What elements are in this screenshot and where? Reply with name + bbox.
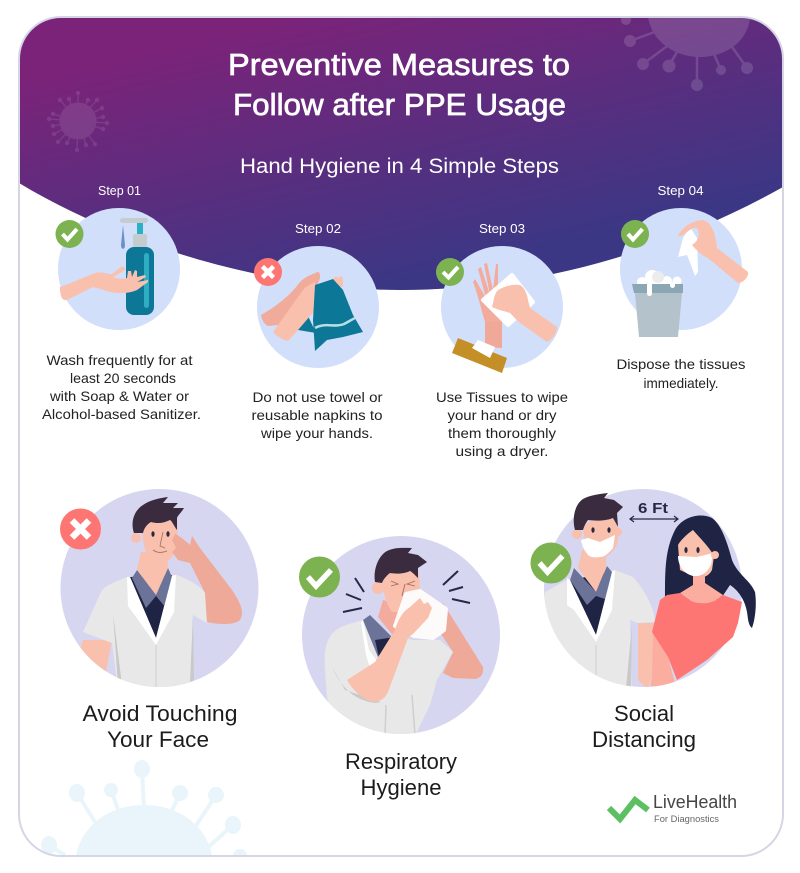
subtitle: Hand Hygiene in 4 Simple Steps xyxy=(240,155,559,178)
step text xyxy=(252,389,383,441)
illustration: man touching face xyxy=(78,497,242,690)
step text: with Soap & Water or xyxy=(49,388,189,404)
6 ft distance marker xyxy=(630,500,678,522)
check badge xyxy=(436,258,464,286)
label: Social xyxy=(614,701,674,726)
6 ft distance marker: 6 Ft xyxy=(638,500,668,517)
step text xyxy=(436,389,568,459)
step text: reusable napkins to xyxy=(252,407,383,423)
label xyxy=(592,701,696,752)
step 01 xyxy=(42,183,201,422)
icon: hand wiped xyxy=(473,263,505,348)
woman xyxy=(665,515,756,628)
icon: soap dispenser xyxy=(120,218,154,315)
logo: LiveHealth: For Diagnostics xyxy=(654,814,720,824)
step text: least 20 seconds xyxy=(70,370,176,386)
step text: wipe your hands. xyxy=(260,425,373,441)
title: Preventive Measures to xyxy=(228,47,570,82)
step text: using a dryer. xyxy=(456,443,548,459)
icon: tissue box xyxy=(452,338,507,373)
step text: them thoroughly xyxy=(448,425,556,441)
step text: Use Tissues to wipe xyxy=(436,389,568,405)
label: Your Face xyxy=(107,727,209,752)
step text xyxy=(42,352,201,422)
cross badge xyxy=(60,508,101,550)
label: Avoid Touching xyxy=(82,701,238,726)
header wave panel xyxy=(19,17,783,290)
illustration: man sneezing into tissue xyxy=(325,548,483,740)
panel: respiratory hygiene xyxy=(299,536,500,800)
step 01: Step 01 xyxy=(98,183,141,198)
step 03: Step 03 xyxy=(479,221,525,236)
step 03 xyxy=(436,221,568,459)
decorative virus bottom left xyxy=(41,760,247,856)
step 04 xyxy=(616,183,748,391)
check badge xyxy=(299,556,340,598)
step 02: Step 02 xyxy=(295,221,341,236)
label: Hygiene xyxy=(360,775,442,800)
decorative virus top right xyxy=(621,15,753,91)
icon: wiping hand xyxy=(492,285,557,342)
step text: Do not use towel or xyxy=(252,389,383,405)
step text: your hand or dry xyxy=(448,407,556,423)
cross badge xyxy=(254,258,282,286)
icon: hands xyxy=(261,272,343,341)
illustration: man and woman with masks xyxy=(540,493,756,690)
icon: hand xyxy=(678,220,748,283)
step text: Wash frequently for at xyxy=(46,352,193,368)
title: Follow after PPE Usage xyxy=(233,87,566,122)
step text: immediately. xyxy=(644,375,718,391)
logo: LiveHealth xyxy=(609,792,737,824)
icon: dropped tissue xyxy=(678,227,698,276)
check badge xyxy=(621,220,649,248)
icon: bucket xyxy=(632,270,683,337)
panel: avoid touching your face xyxy=(60,489,258,752)
decorative virus left xyxy=(47,91,109,152)
step text: Alcohol-based Sanitizer. xyxy=(42,406,201,422)
step 02 xyxy=(252,221,383,441)
step text: Dispose the tissues xyxy=(616,356,746,372)
check badge xyxy=(530,542,572,584)
step text xyxy=(616,356,746,391)
label: Respiratory xyxy=(345,749,457,774)
icon: hand under soap xyxy=(60,267,148,300)
check badge xyxy=(56,220,84,248)
title xyxy=(228,47,570,122)
step 04: Step 04 xyxy=(658,183,704,198)
icon: towel xyxy=(313,279,363,351)
logo: LiveHealth: LiveHealth xyxy=(653,792,737,812)
label: Distancing xyxy=(592,727,696,752)
label xyxy=(345,749,457,800)
icon: tissue xyxy=(483,275,533,325)
panel: social distancing xyxy=(530,489,756,752)
label xyxy=(82,701,238,752)
icon: towel back xyxy=(298,316,316,333)
